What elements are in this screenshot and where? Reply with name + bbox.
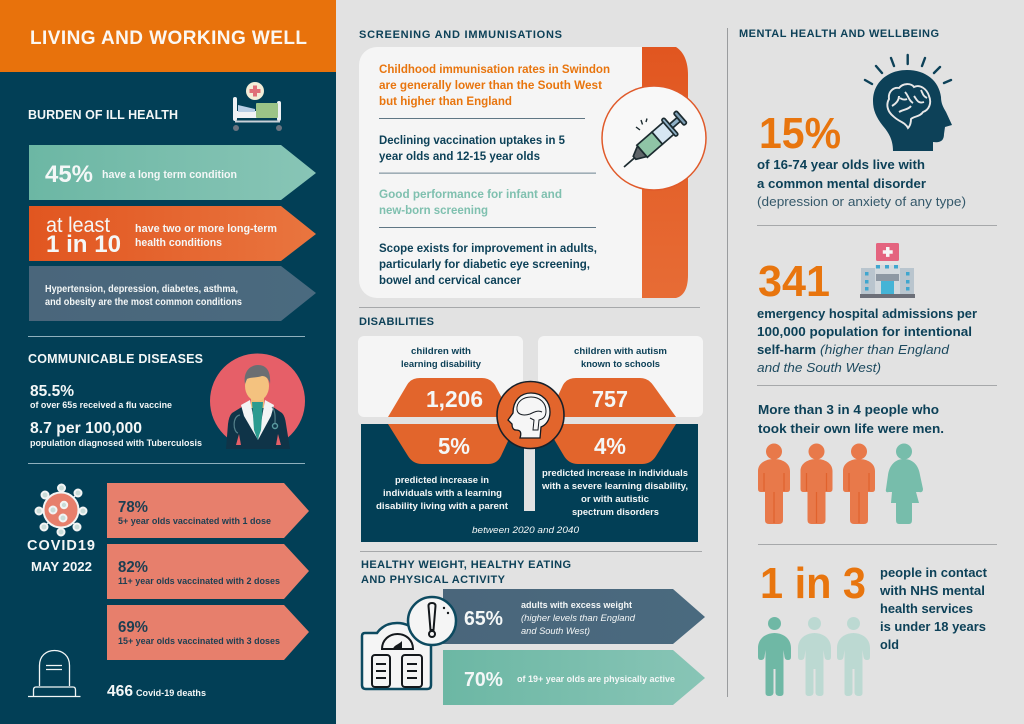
arrow: excess weight: adults with excess weight: [521, 600, 633, 611]
card: learning disability: learning disability: [401, 359, 482, 370]
badge: 1,206: [388, 378, 512, 417]
arrow: excess weight: (higher levels than England: [521, 613, 636, 624]
panel: predicted increase: [361, 424, 698, 542]
text: predicted increase right: or with autistic: [581, 494, 649, 505]
text: predicted increase right: spectrum disorders: [572, 507, 659, 518]
arrow: physically active: 70%: [464, 669, 503, 691]
stat: 15%: (depression or anxiety of any type): [757, 195, 966, 209]
arrow: most common conditions: [29, 266, 316, 321]
label: covid19 may 2022: MAY 2022: [31, 560, 92, 574]
arrow: 45% long term condition: 45%: [45, 161, 93, 188]
card background: [359, 47, 679, 298]
arrow: 45% long term condition: have a long term condition: [102, 169, 237, 181]
text: scope for improvement: particularly for diabetic eye screening,: [379, 257, 590, 271]
icon: syringe in circle: [602, 86, 706, 190]
title banner: LIVING AND WORKING WELL: [30, 28, 307, 49]
icon: hospital bed: [233, 82, 282, 131]
icon: weighing scale: [362, 597, 456, 689]
text: immunisation rates: but higher than England: [379, 94, 512, 108]
arrow: most common conditions: Hypertension, depression, diabetes, asthma,: [45, 284, 238, 295]
stat: tuberculosis: 8.7 per 100,000: [30, 420, 142, 437]
badge: 4%: [545, 424, 676, 464]
orange side bar: [642, 47, 688, 298]
text: good performance: [379, 187, 562, 217]
badge: 4%: 4%: [594, 433, 626, 459]
text: immunisation rates: [379, 62, 610, 108]
text: scope for improvement: bowel and cervical cancer: [379, 273, 521, 287]
arrow: at least 1 in 10: health conditions: [135, 237, 222, 249]
text: predicted increase left: disability living with a parent: [376, 501, 509, 512]
caption: between 2020 and 2040: between 2020 and 2040: [472, 525, 580, 536]
stat: 341 admissions: 341: [758, 257, 830, 306]
stat: 341 admissions: (higher than England: [820, 343, 950, 357]
card: autism: known to schools: [581, 359, 660, 370]
card: autism: [538, 336, 703, 417]
heading: healthy weight: [361, 559, 571, 586]
arrow: 78% one dose: 5+ year olds vaccinated with 1 dose: [118, 516, 271, 527]
text: good performance: Good performance for infant and: [379, 187, 562, 201]
badge: 757: [548, 378, 676, 417]
arrow: 82% two doses: 11+ year olds vaccinated with 2 doses: [118, 576, 280, 587]
title banner: [0, 0, 336, 72]
stat: covid deaths: 466: [107, 683, 133, 700]
card: learning disability: children with: [411, 346, 471, 357]
arrow: 45% long term condition: [29, 145, 316, 200]
stat: 15%: of 16-74 year olds live with: [757, 158, 925, 172]
text: scope for improvement: [379, 241, 597, 287]
text: predicted increase right: [541, 468, 688, 518]
heading: healthy weight: AND PHYSICAL ACTIVITY: [361, 574, 506, 586]
stat: 1 in 3: people in contact: [880, 565, 988, 580]
stat: 1 in 3: 1 in 3: [760, 559, 866, 608]
text: 3 in 4 men: took their own life were men.: [758, 422, 944, 436]
arrow: 82% two doses: 82%: [118, 559, 148, 576]
card: autism: children with autism: [574, 346, 667, 357]
stat: 1 in 3: [760, 559, 988, 652]
stat: 341 admissions: 100,000 population for intentional: [757, 325, 972, 339]
badge: 757: 757: [592, 386, 628, 412]
heading: disabilities: DISABILITIES: [359, 316, 434, 328]
heading: communicable diseases: COMMUNICABLE DISEASES: [28, 352, 203, 366]
arrow: 78% one dose: 78%: [118, 499, 148, 516]
stat: tuberculosis: population diagnosed with Tuberculosis: [30, 438, 202, 449]
stat: covid deaths: Covid-19 deaths: [136, 688, 206, 699]
panel: screening and immunisations: [359, 29, 706, 298]
icon: head with brain and rays: [865, 55, 952, 151]
arrow: 82% two doses: [107, 544, 309, 599]
arrow: at least 1 in 10: at least: [46, 214, 110, 237]
label: covid19 may 2022: COVID19: [27, 538, 95, 554]
pictogram: one in three people: [758, 617, 870, 696]
stat: 1 in 3: old: [880, 637, 899, 652]
arrow: excess weight: [443, 589, 705, 644]
text: declining uptakes: Declining vaccination uptakes in 5: [379, 133, 565, 147]
arrow: 69% three doses: 15+ year olds vaccinated with 3 doses: [118, 636, 280, 647]
stat: 341 admissions: self-harm: [757, 343, 816, 357]
arrow: 78% one dose: [107, 483, 309, 538]
arrow: physically active: [443, 650, 705, 705]
icon: doctor: [210, 354, 305, 449]
text: predicted increase right: with a severe learning disability,: [541, 481, 688, 492]
arrow: at least 1 in 10: 1 in 10: [46, 231, 121, 258]
badge: 5%: 5%: [438, 433, 470, 459]
stat: flu vaccine: 85.5%: [30, 383, 74, 400]
text: good performance: new-born screening: [379, 203, 488, 217]
card: learning disability: [358, 336, 523, 417]
panel: left sidebar: [0, 0, 336, 724]
heading: healthy weight: HEALTHY WEIGHT, HEALTHY EATING: [361, 559, 571, 571]
stat: 1 in 3: with NHS mental: [879, 583, 985, 598]
stat: 15%: a common mental disorder: [757, 177, 926, 191]
badge: 5%: [388, 424, 516, 464]
stat: covid deaths: [107, 683, 206, 700]
arrow: excess weight: and South West): [521, 626, 590, 637]
badge: 1,206: 1,206: [426, 386, 483, 412]
stat: 1 in 3: health services: [880, 601, 973, 616]
stat: tuberculosis: [30, 420, 202, 449]
arrow: 69% three doses: 69%: [118, 619, 148, 636]
text: scope for improvement: Scope exists for improvement in adults,: [379, 241, 597, 255]
arrow: physically active: of 19+ year olds are physically active: [517, 674, 675, 685]
label: covid19 may 2022: [27, 538, 95, 574]
text: predicted increase left: predicted increase in: [395, 475, 489, 486]
panel: healthy weight: [361, 559, 705, 705]
icon: coronavirus: [36, 484, 86, 536]
text: immunisation rates: are generally lower than the South West: [379, 78, 602, 92]
stat: 1 in 3: is under 18 years: [880, 619, 986, 634]
arrow: most common conditions: and obesity are the most common conditions: [45, 297, 242, 308]
text: predicted increase right: predicted increase in individuals: [542, 468, 688, 479]
arrow: excess weight: 65%: [464, 608, 503, 630]
stat: flu vaccine: of over 65s received a flu vaccine: [30, 400, 172, 411]
text: declining uptakes: year olds and 12-15 year olds: [379, 149, 540, 163]
stat: 15%: 15%: [759, 109, 841, 158]
panel: mental health and wellbeing: [739, 28, 997, 696]
heading: mental health: MENTAL HEALTH AND WELLBEING: [739, 28, 939, 40]
pictogram: three men, one woman: [758, 444, 923, 524]
stat: 341 admissions: [757, 257, 977, 375]
arrow: at least 1 in 10: [29, 206, 316, 261]
arrow: 69% three doses: [107, 605, 309, 660]
text: declining uptakes: [379, 133, 565, 163]
heading: burden of ill health: BURDEN OF ILL HEALTH: [28, 108, 178, 122]
panel: disabilities: [358, 316, 703, 542]
stat: flu vaccine: [30, 383, 172, 411]
stat: 341 admissions: and the South West): [757, 361, 881, 375]
stat: 15%: [757, 109, 966, 209]
text: predicted increase left: [376, 475, 509, 512]
icon: hospital: [860, 243, 915, 298]
icon: head with brain: [497, 382, 564, 448]
icon: gravestone: [28, 650, 80, 696]
stat: 341 admissions: emergency hospital admissions per: [757, 307, 977, 321]
arrow: at least 1 in 10: have two or more long-term: [135, 223, 277, 235]
text: 3 in 4 men: [758, 403, 944, 436]
text: predicted increase left: individuals with a learning: [383, 488, 502, 499]
heading: screening: SCREENING AND IMMUNISATIONS: [359, 29, 562, 41]
text: 3 in 4 men: More than 3 in 4 people who: [758, 403, 939, 417]
text: immunisation rates: Childhood immunisation rates in Swindon: [379, 62, 610, 76]
